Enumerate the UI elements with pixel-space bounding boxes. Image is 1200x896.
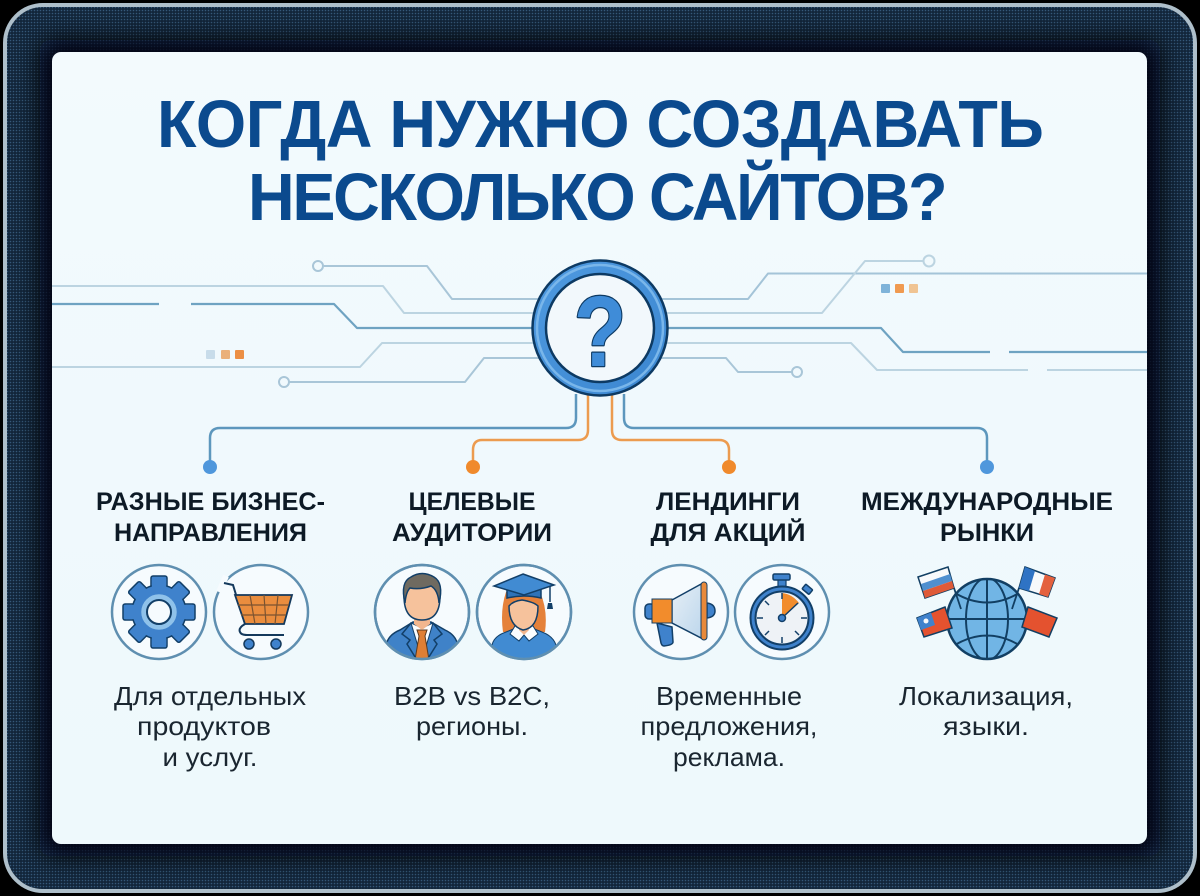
column headings: АУДИТОРИИ xyxy=(392,519,552,547)
column descriptions: Для отдельных xyxy=(114,681,306,711)
icon: globe with flags xyxy=(917,567,1057,660)
column descriptions: предложения, xyxy=(640,711,818,741)
column headings: НАПРАВЛЕНИЯ xyxy=(114,519,307,547)
icon: megaphone xyxy=(634,565,728,659)
column descriptions: регионы. xyxy=(416,711,528,741)
title: КОГДА НУЖНО СОЗДАВАТЬ xyxy=(157,86,1044,161)
decorative squares left xyxy=(206,350,244,359)
column descriptions: продуктов xyxy=(137,711,271,741)
title: НЕСКОЛЬКО САЙТОВ? xyxy=(248,158,948,234)
column headings: ДЛЯ АКЦИЙ xyxy=(650,517,806,547)
column descriptions: Временные xyxy=(656,681,802,711)
circuit lines xyxy=(52,256,1147,387)
column descriptions: B2B vs B2C, xyxy=(394,681,550,711)
column headings: МЕЖДУНАРОДНЫЕ xyxy=(861,488,1113,516)
icon: gear xyxy=(112,565,206,659)
column descriptions: языки. xyxy=(943,711,1029,741)
column headings: РАЗНЫЕ БИЗНЕС- xyxy=(96,488,325,516)
column headings: ЛЕНДИНГИ xyxy=(656,488,800,516)
central question mark badge xyxy=(532,260,668,396)
title xyxy=(157,86,1044,234)
icon: graduate xyxy=(477,565,571,660)
central question mark badge: ? xyxy=(574,276,626,387)
icon: businessman xyxy=(375,565,469,660)
icon: shopping cart xyxy=(214,565,308,659)
column descriptions: реклама. xyxy=(673,742,785,772)
column headings: ЦЕЛЕВЫЕ xyxy=(408,488,536,516)
decorative squares right xyxy=(881,284,918,293)
column descriptions: и услуг. xyxy=(162,742,258,772)
column headings xyxy=(96,488,1113,547)
icon: stopwatch xyxy=(735,565,829,659)
column headings: РЫНКИ xyxy=(940,519,1034,547)
connectors to columns xyxy=(203,394,994,474)
column descriptions xyxy=(114,681,1073,772)
column descriptions: Локализация, xyxy=(899,681,1073,711)
